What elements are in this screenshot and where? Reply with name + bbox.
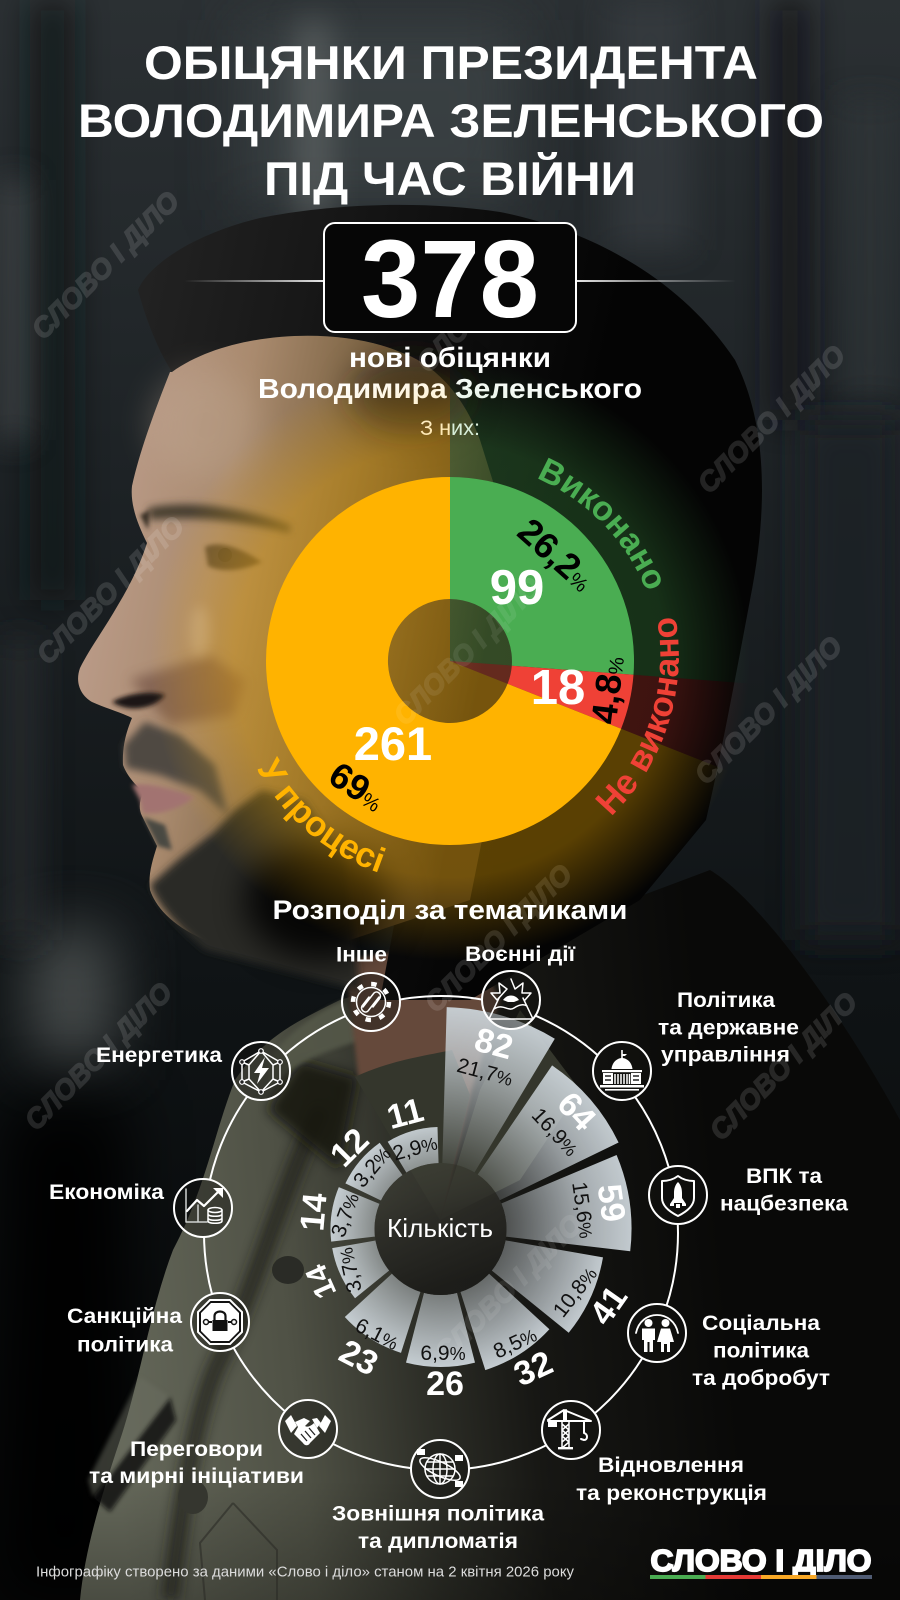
donut value: 261: 261: [354, 717, 432, 770]
rose values: 26: [426, 1365, 464, 1403]
donut percent: 69%: 69%: [322, 754, 393, 820]
rose values: 14: [293, 1192, 335, 1233]
topic labels: Економіка: [49, 1181, 164, 1204]
topic labels: управління: [661, 1044, 790, 1066]
topic labels: Інше: [336, 944, 387, 966]
rose values: 6,9%: [420, 1342, 466, 1365]
topic labels: Санкційна: [67, 1305, 182, 1328]
topic labels: [49, 943, 848, 1553]
topic labels: та добробут: [692, 1367, 830, 1390]
icon: politics, capitol building: [593, 1042, 651, 1100]
rose values: 3,7%: [334, 1245, 367, 1295]
rose centre label: Кількість: [387, 1213, 493, 1243]
rose values: 12: [323, 1121, 377, 1175]
photo: head hair: [138, 205, 762, 1000]
photo: neck: [345, 940, 500, 1215]
rose values: 16,9%: [527, 1104, 582, 1161]
topic labels: та мирні ініціативи: [89, 1465, 304, 1488]
donut chart: [168, 370, 736, 952]
topic labels: Соціальна: [702, 1312, 820, 1335]
watermarks: СЛОВО І ДІЛО: [25, 185, 185, 345]
icon: economy, chart and coins: [174, 1179, 232, 1237]
icon: military actions, explosion: [482, 971, 540, 1029]
icon: sanctions, octagon with lock: [191, 1293, 249, 1351]
watermarks: [18, 185, 863, 1146]
icon: energy, hexagon network with bolt: [232, 1042, 290, 1100]
topic labels: Енергетика: [96, 1044, 222, 1067]
rose values: 3,7%: [327, 1190, 364, 1240]
photo: face: [78, 336, 530, 990]
rose values: 11: [383, 1091, 428, 1137]
rose values: 3,2%: [349, 1143, 396, 1192]
topic labels: Переговори: [130, 1438, 263, 1461]
rose values: 23: [333, 1332, 384, 1383]
rose values: 21,7%: [454, 1054, 515, 1091]
rose centre disk: [374, 1163, 506, 1295]
title: [78, 36, 824, 205]
watermarks: СЛОВО І ДІЛО: [691, 339, 851, 499]
topic labels: політика: [77, 1334, 173, 1356]
topic labels: та дипломатія: [358, 1530, 518, 1553]
topic labels: нацбезпека: [720, 1192, 848, 1216]
icon: reconstruction, tower crane: [542, 1401, 600, 1459]
icon: foreign policy, globe with flags: [411, 1440, 469, 1498]
topic labels: Воєнні дії: [465, 943, 576, 966]
watermarks: СЛОВО І ДІЛО: [410, 218, 570, 378]
rose values: 59: [590, 1182, 632, 1225]
total counter: 378: 378: [361, 218, 539, 341]
watermarks: СЛОВО І ДІЛО: [18, 976, 178, 1136]
watermark over donut hole: СЛОВО І ДІЛО: [387, 571, 547, 731]
icon: defence, shield and rocket: [649, 1166, 707, 1224]
title: ПІД ЧАС ВІЙНИ: [264, 152, 636, 205]
donut value: 18: 18: [531, 661, 585, 715]
photo: collar: [355, 1010, 580, 1220]
topic ring: [204, 996, 678, 1470]
rose values: 64: [549, 1085, 603, 1139]
icon: negotiations, handshake: [279, 1400, 337, 1458]
logo: СЛОВО І ДІЛО: [650, 1543, 872, 1578]
total counter: 378: [184, 218, 736, 341]
donut value: 99: 99: [490, 561, 544, 615]
subtitle: З них:: [420, 417, 480, 440]
title: ВОЛОДИМИРА ЗЕЛЕНСЬКОГО: [78, 94, 824, 147]
rose values: 41: [582, 1279, 635, 1332]
section heading: Розподіл за тематиками: [272, 895, 628, 925]
icon: other, gear with chain: [342, 973, 400, 1031]
donut percent: 26,2%: 26,2%: [510, 510, 603, 599]
topic labels: Зовнішня політика: [332, 1502, 544, 1526]
donut label: done: Виконано: [538, 458, 661, 588]
rose values: 2,9%: [390, 1132, 440, 1165]
donut percent: 4,8%: 4,8%: [583, 654, 632, 726]
icon: social policy, two people: [628, 1304, 686, 1362]
photo: jacket: [80, 870, 900, 1600]
rose chart: [293, 1007, 635, 1403]
rose values: 10,8%: [549, 1263, 602, 1322]
source note: Інфографіку створено за даними «Слово і діло» станом на 2 квітня 2026 року: [36, 1564, 574, 1580]
watermarks: СЛОВО І ДІЛО: [688, 630, 848, 790]
donut label: not done: Не виконано: [595, 618, 679, 816]
rose values: 82: [471, 1021, 517, 1067]
rose values: [293, 1021, 635, 1403]
subtitle: нові обіцянки: [349, 342, 551, 373]
rose values: 14: [299, 1259, 343, 1303]
watermarks: СЛОВО І ДІЛО: [418, 858, 578, 1018]
topic labels: політика: [713, 1340, 809, 1362]
rose values: 32: [508, 1344, 559, 1394]
topic labels: Політика: [677, 989, 775, 1012]
watermarks: СЛОВО І ДІЛО: [703, 986, 863, 1146]
rose values: 15,6%: [567, 1180, 598, 1240]
subtitle: [258, 342, 642, 440]
topic labels: Відновлення: [598, 1454, 744, 1477]
donut label: in progress: У процесі: [258, 756, 386, 872]
rose values: 8,5%: [490, 1323, 541, 1363]
topic labels: та державне: [658, 1016, 799, 1040]
rose values: 6,1%: [351, 1314, 402, 1355]
watermark over rose: СЛОВО І ДІЛО: [428, 1208, 588, 1368]
topic labels: та реконструкція: [576, 1482, 767, 1505]
subtitle: Володимира Зеленського: [258, 373, 642, 404]
watermarks: СЛОВО І ДІЛО: [30, 510, 190, 670]
title: ОБІЦЯНКИ ПРЕЗИДЕНТА: [144, 36, 758, 89]
topic labels: ВПК та: [746, 1165, 822, 1188]
